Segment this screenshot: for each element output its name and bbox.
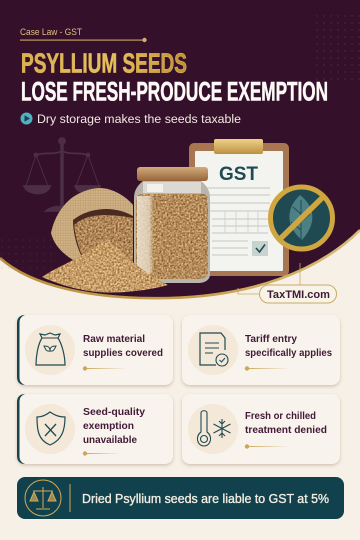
conclusion banner	[17, 477, 344, 519]
brand badge	[238, 263, 336, 303]
panel: tariff entry: specifically applies	[245, 348, 332, 359]
icon: thermometer and snowflake	[188, 404, 238, 454]
illustration: clipboard with GST form	[189, 139, 289, 276]
illustration: clipboard with GST form: GST	[219, 164, 258, 185]
illustration: glass jar with seeds	[134, 167, 210, 283]
panel: fresh or chilled: treatment denied	[245, 425, 327, 436]
title: PSYLLIUM SEEDS	[21, 48, 187, 78]
panel: fresh or chilled: Fresh or chilled	[245, 411, 316, 422]
panel: seed-quality exemption: unavailable	[83, 435, 137, 446]
dark header panel with curved edge	[0, 0, 360, 298]
panel: seed-quality exemption: Seed-quality	[83, 407, 145, 418]
subtitle with play bullet: Dry storage makes the seeds taxable	[37, 112, 241, 126]
icon: crossed-out leaf badge	[270, 187, 332, 249]
panel: seed-quality exemption	[17, 394, 173, 464]
panel: raw material: Raw material	[83, 334, 145, 345]
panel: raw material	[17, 315, 173, 385]
brand badge: TaxTMI.com	[267, 289, 330, 301]
category label	[20, 27, 147, 42]
curved gold edge	[0, 230, 360, 298]
icon: faded scales of justice	[24, 138, 100, 211]
panel: seed-quality exemption: exemption	[83, 421, 134, 432]
illustration: burlap sack	[51, 188, 133, 262]
icon: scales in circle	[25, 480, 61, 516]
category label: Case Law - GST	[20, 27, 83, 37]
title	[21, 48, 328, 106]
panel: raw material: supplies covered	[83, 348, 163, 359]
illustration: seed pile	[42, 240, 168, 293]
panel: fresh or chilled	[182, 394, 340, 464]
icon: document with check	[188, 325, 238, 375]
icon: seed sack	[25, 325, 75, 375]
icon: shield with cross	[25, 404, 75, 454]
panel: tariff entry	[182, 315, 340, 385]
conclusion banner: Dried Psyllium seeds are liable to GST at 5%	[82, 491, 329, 506]
panel: tariff entry: Tariff entry	[245, 334, 297, 345]
